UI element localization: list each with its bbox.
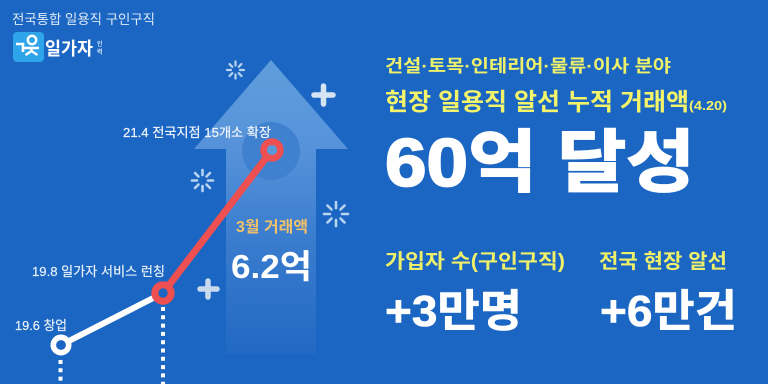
label: 19.6: 19.6 창업 [15,318,67,333]
logo: 일가자 [13,32,103,62]
arrow highlight circle [242,122,300,180]
label: 19.8: 19.8 일가자 서비스 런칭 [32,264,165,279]
logo: 일가자: 력 [97,48,103,56]
icon: sparkle top [227,62,244,78]
icon: sparkle left [192,170,213,191]
service tagline: 전국통합 일용직 구인구직 [12,12,155,27]
node 19.6 [53,337,69,353]
logo icon [13,32,44,62]
label: 21.4: 21.4 전국지점 15개소 확장 [123,125,271,140]
logo wordmark: 일가자 [45,39,93,59]
icon: plus bottom [200,281,217,297]
icon: sparkle right [324,202,348,226]
headline: 60억 달성: 60억 달성 [385,125,695,201]
white segment [61,293,163,345]
callout value: 6.2억: 6.2억 [231,248,312,285]
logo small mark: 인 [97,40,103,48]
stat value: members: +3만명 [385,287,522,336]
icon: plus top [314,86,333,104]
heading date: (4.20) [689,98,727,113]
stat value: placements: +6만건 [600,287,737,336]
dotted drop line 19.8 [161,307,165,384]
callout: 3월 거래액: 3월 거래액 [236,218,308,236]
icon: upward arrow [194,60,348,354]
stat label: placements: 전국 현장 알선 [599,250,727,273]
stat label: members: 가입자 수(구인구직) [385,250,565,273]
red segment [163,150,272,293]
heading: cumulative transactions: 현장 일용직 알선 누적 거래액 [385,89,689,116]
node 19.8 [155,285,171,301]
node 21.4 [264,142,280,158]
subtitle: fields: 건설·토목·인테리어·물류·이사 분야 [385,56,671,76]
growth line chart [53,142,280,384]
dotted drop line 19.6 [58,360,62,384]
